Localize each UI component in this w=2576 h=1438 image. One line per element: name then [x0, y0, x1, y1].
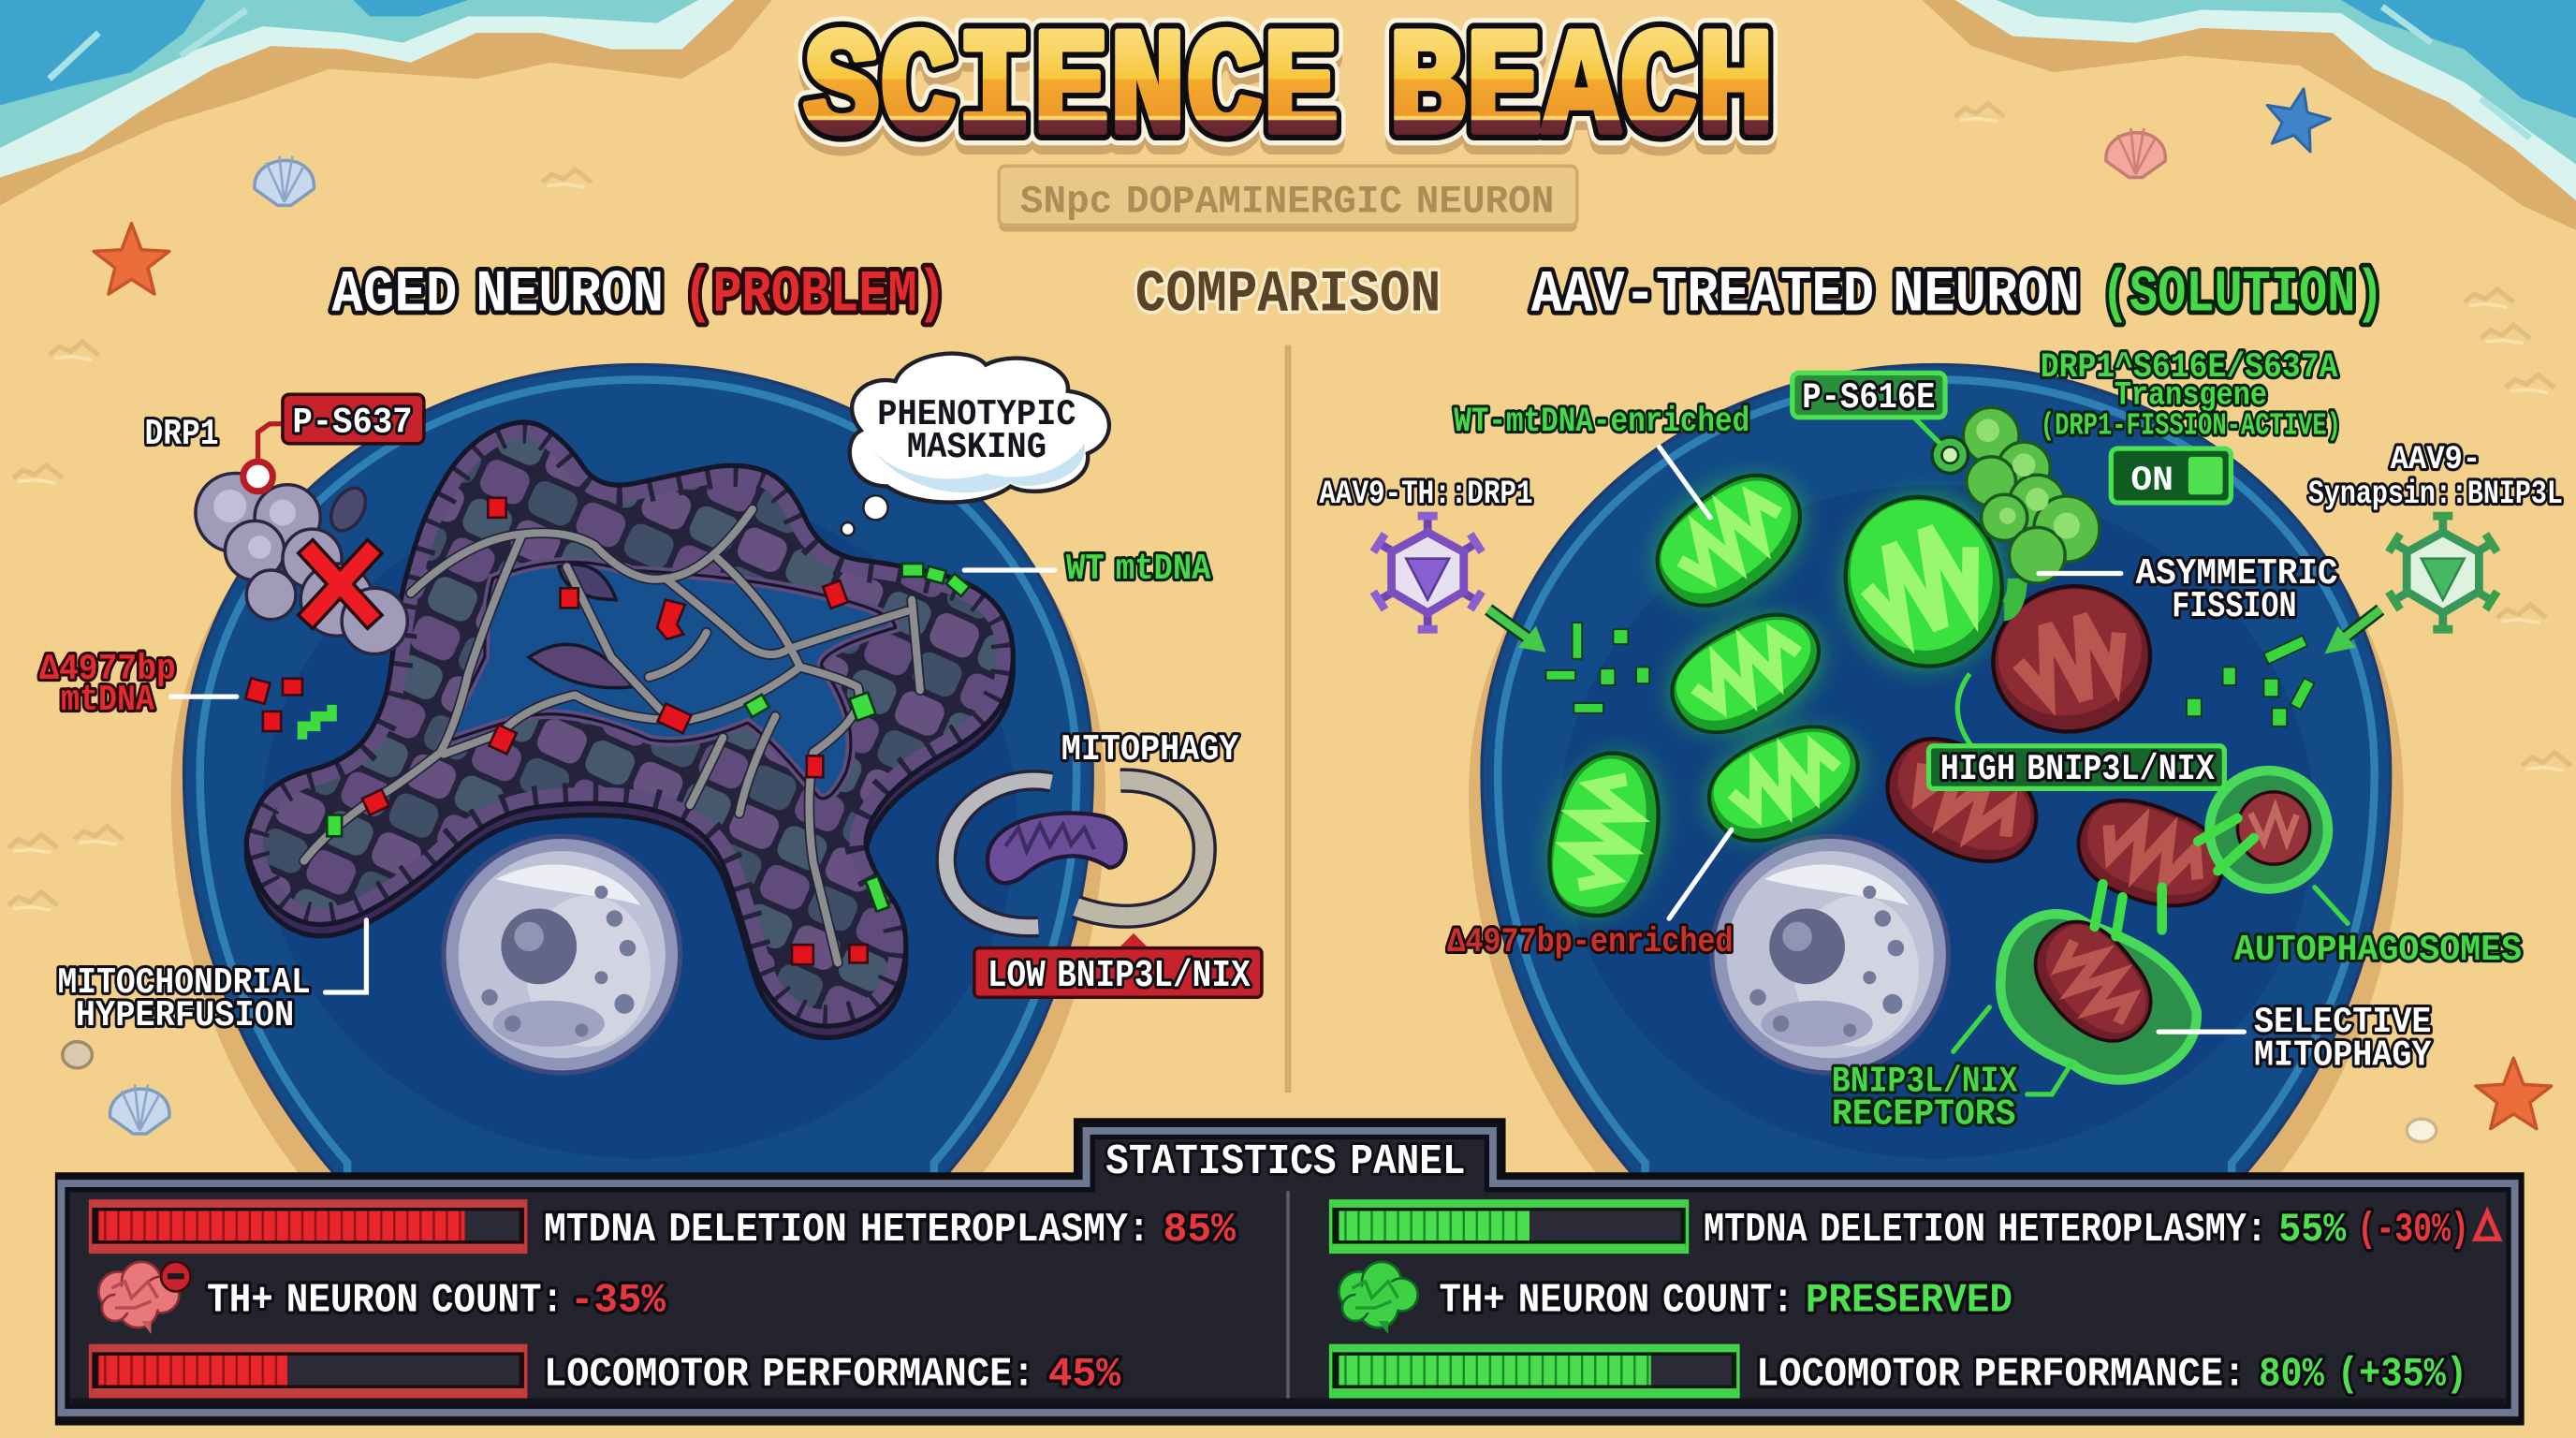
subtitle plaque: SNpc DOPAMINERGIC NEURON [1020, 179, 1554, 224]
title: SCIENCE [803, 7, 1339, 177]
ocean: top left [0, 0, 772, 205]
stat: aged locomotor 45%: 45% [1048, 1351, 1121, 1398]
callout: low BNIP3L/NIX: LOW BNIP3L/NIX [988, 955, 1251, 998]
label: WT mtDNA: WT mtDNA [1066, 549, 1211, 590]
stat: aged heteroplasmy 85%: MTDNA DELETION HETEROPLASMY: [544, 1207, 1150, 1254]
label: deletion mtDNA: Δ4977bp [39, 649, 176, 690]
title: SCIENCE [803, 7, 1339, 177]
label: AAV9-TH::DRP1: AAV9-TH::DRP1 [1319, 476, 1532, 513]
nucleus: treated neuron [1712, 836, 1949, 1073]
callout: high BNIP3L/NIX: HIGH BNIP3L/NIX [1940, 749, 2216, 790]
label: selective mitophagy: SELECTIVE [2254, 1002, 2431, 1043]
label: transgene: Transgene [2115, 377, 2267, 415]
icon: shell top right [2106, 128, 2165, 178]
stat: TH+ count -35%: -35% [570, 1278, 666, 1325]
bar: treated locomotor performance [1331, 1345, 1738, 1397]
thought cloud: phenotypic masking: MASKING [907, 427, 1046, 468]
callout: P-S637 phospho site: P-S637 [292, 403, 413, 444]
label: AAV9-Synapsin::BNIP3L: AAV9- [2391, 441, 2481, 478]
icon: pebble right [2407, 1119, 2437, 1142]
label: transgene [2041, 348, 2341, 444]
autophagosome upper right [2198, 770, 2328, 888]
stat: TH+ count preserved [1439, 1278, 2012, 1325]
label: deletion mtDNA: mtDNA [61, 680, 155, 721]
statistics panel [57, 1121, 2522, 1423]
icon: DRP1 cluster with red X [196, 473, 407, 654]
label: transgene: DRP1^S616E/S637A [2041, 348, 2338, 388]
icon: purple virus [1373, 516, 1482, 629]
label: autophagosomes: AUTOPHAGOSOMES [2234, 930, 2522, 971]
stat: treated heteroplasmy 55%: MTDNA DELETION HETEROPLASMY: [1704, 1207, 2267, 1254]
label: DRP1: DRP1 [145, 414, 218, 455]
label: autophagosomes [2234, 888, 2522, 971]
stat: treated heteroplasmy 55%: (-30%) [2358, 1207, 2469, 1254]
callout: P-S637 phospho site [243, 394, 424, 492]
healthy green mitochondria [1530, 454, 2026, 929]
label: deletion enriched [1447, 829, 1734, 962]
mitochondrial tubes [304, 509, 920, 962]
damaged red mitochondria [1867, 568, 2238, 929]
stat: TH+ count preserved: PRESERVED [1806, 1278, 2012, 1325]
label: BNIP3L/NIX receptors [1832, 1007, 2071, 1135]
bar: aged mtDNA deletion heteroplasmy [91, 1201, 526, 1252]
label: selective mitophagy: MITOPHAGY [2254, 1034, 2432, 1076]
stat: treated locomotor 80%: 80% (+35%) [2259, 1351, 2467, 1398]
title: BEACH [1388, 7, 1774, 177]
title: BEACH [1388, 7, 1774, 177]
decorative sand marks [8, 104, 2571, 910]
arrow: green virus to cell [2324, 609, 2380, 654]
heading: aged neuron [332, 261, 946, 329]
icon: healthy brain [1339, 1262, 1418, 1334]
title: SCIENCE [803, 17, 1339, 187]
label: mitochondrial hyperfusion: MITOCHONDRIAL [57, 962, 311, 1004]
title: SCIENCE [803, 7, 1339, 177]
mitophagy: failed autophagosome with mitochondrion [946, 729, 1239, 927]
label: BNIP3L/NIX receptors: RECEPTORS [1832, 1093, 2015, 1135]
label: deletion mtDNA [39, 649, 237, 721]
nucleus: aged neuron [444, 836, 681, 1073]
heading: AAV-treated neuron: AAV-TREATED NEURON [1531, 261, 2080, 329]
wild-type mtDNA green segments [327, 564, 970, 912]
label: BNIP3L/NIX receptors: BNIP3L/NIX [1832, 1061, 2018, 1102]
heading: aged neuron: (PROBLEM) [683, 261, 946, 329]
icon: ON switch: ON [2130, 462, 2174, 501]
icon: damaged brain [98, 1262, 191, 1334]
label: asymmetric fission: ASYMMETRIC [2136, 553, 2337, 594]
stat: TH+ count preserved: TH+ NEURON COUNT: [1439, 1278, 1794, 1325]
selective mitophagy autophagosome [2000, 884, 2197, 1079]
stat: aged locomotor 45%: LOCOMOTOR PERFORMANCE: [544, 1351, 1035, 1398]
label: deletion enriched: Δ4977bp-enriched [1447, 923, 1734, 962]
vector payload fragments left [1546, 623, 1649, 713]
icon: blue starfish [2260, 82, 2335, 154]
stat: treated locomotor 80%: LOCOMOTOR PERFORMANCE: [1756, 1351, 2246, 1398]
callout: P-S616E: P-S616E [1802, 377, 1935, 418]
label: transgene: (DRP1-FISSION-ACTIVE) [2041, 408, 2341, 444]
free mtDNA fragments [245, 678, 332, 740]
title: BEACH [1388, 7, 1774, 177]
thought cloud: phenotypic masking: PHENOTYPIC [877, 394, 1076, 435]
panel divider [1286, 1191, 1290, 1399]
callout: high BNIP3L/NIX [1928, 674, 2224, 790]
panel: AAV-treated neuron cell [1319, 348, 2563, 1239]
label: WT mtDNA enriched [1454, 403, 1749, 518]
mitochondrial hyperfusion network [246, 422, 1013, 1037]
icon: shell bottom left [110, 1084, 169, 1134]
subtitle plaque [999, 166, 1577, 231]
icon: green virus [2389, 516, 2497, 629]
statistics heading: STATISTICS PANEL [1105, 1137, 1466, 1186]
heading: aged neuron: AGED NEURON [332, 261, 664, 329]
label: selective mitophagy [2159, 1002, 2432, 1076]
heading: AAV-treated neuron: (SOLUTION) [2101, 261, 2384, 329]
icon: pebble left [63, 1042, 92, 1068]
panel: aged neuron cell [39, 354, 1262, 1239]
stat: aged heteroplasmy 85%: 85% [1164, 1207, 1236, 1254]
mitophagy: failed autophagosome with mitochondrion: MITOPHAGY [1061, 729, 1239, 770]
stat: treated heteroplasmy 55%: 55% [2278, 1207, 2347, 1254]
mutant mtDNA red spots [362, 498, 868, 964]
bar: treated mtDNA deletion heteroplasmy [1331, 1201, 1687, 1252]
arrow: purple virus to cell [1488, 609, 1546, 653]
title [803, 7, 1774, 187]
label: mitochondrial hyperfusion: HYPERFUSION [76, 995, 294, 1036]
ocean: top right [1922, 0, 2576, 230]
label: AAV9-Synapsin::BNIP3L [2308, 441, 2563, 513]
stat: TH+ count -35%: TH+ NEURON COUNT: [207, 1278, 564, 1325]
label: asymmetric fission: FISSION [2172, 586, 2297, 627]
icon: starfish left [94, 224, 169, 294]
bar: aged locomotor performance [91, 1345, 526, 1397]
icon: ON switch [2111, 448, 2231, 503]
icon: starfish bottom right [2476, 1058, 2552, 1129]
label: mitochondrial hyperfusion [57, 920, 366, 1036]
title: BEACH [1388, 17, 1774, 187]
thought cloud: phenotypic masking [842, 354, 1109, 536]
icon: shell top left [255, 156, 314, 205]
callout: low BNIP3L/NIX [974, 933, 1262, 998]
centre divider [1284, 345, 1292, 1093]
label: WT mtDNA enriched: WT-mtDNA-enriched [1454, 403, 1749, 442]
vector payload fragments right [2187, 636, 2314, 726]
label: asymmetric fission [2039, 553, 2337, 627]
heading: comparison: COMPARISON [1135, 261, 1441, 329]
callout: P-S616E [1793, 373, 1945, 444]
icon: green DRP1 fission complex [1932, 407, 2100, 611]
